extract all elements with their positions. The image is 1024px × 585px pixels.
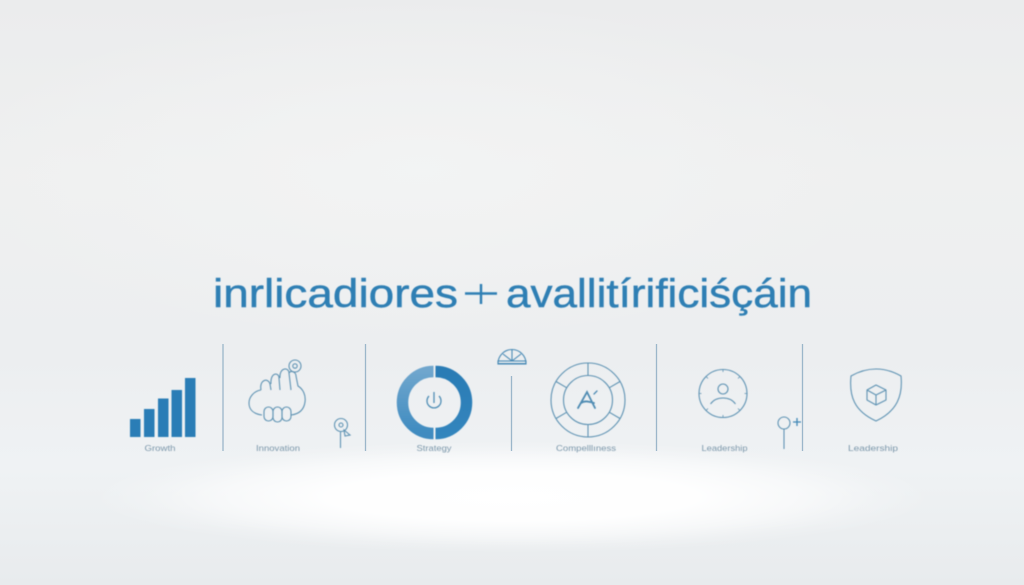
- panel: growth: [130, 378, 196, 453]
- bar chart: growth: [130, 378, 196, 437]
- label: Innovation: Innovation: [256, 443, 300, 453]
- icon: small magnifier pin: [334, 418, 350, 448]
- title: avallitírificiśçáin: [506, 272, 812, 316]
- donut chart: [402, 372, 466, 434]
- panel: competitiveness: [551, 363, 625, 453]
- icon: pin with plus: [778, 417, 801, 449]
- panel: innovation: [249, 360, 350, 453]
- icon: power: [427, 392, 441, 408]
- icon: shield with cube: [851, 369, 901, 421]
- label: Leadership: Leadership: [702, 443, 748, 453]
- label: Strategy: Strategy: [416, 443, 452, 453]
- title plus sign: [465, 284, 497, 304]
- icon: letter A: [578, 391, 597, 408]
- panel: leadership 2: [848, 369, 901, 453]
- icon: fan arch: [498, 350, 526, 364]
- icon: segmented wheel: [551, 363, 625, 437]
- label: Competitiveness: Compelllıness: [556, 443, 616, 453]
- icon: hand on cloud: [249, 360, 305, 422]
- label: Growth: Growth: [144, 443, 176, 453]
- title: inrlicadiores: [213, 272, 458, 316]
- icon: person in dial: [699, 370, 747, 418]
- title: [213, 272, 812, 316]
- label: Leadership: Leadership: [848, 443, 898, 453]
- panel: leadership 1: [699, 370, 801, 453]
- panel: strategy: [402, 350, 526, 453]
- vertical dividers: [223, 344, 802, 451]
